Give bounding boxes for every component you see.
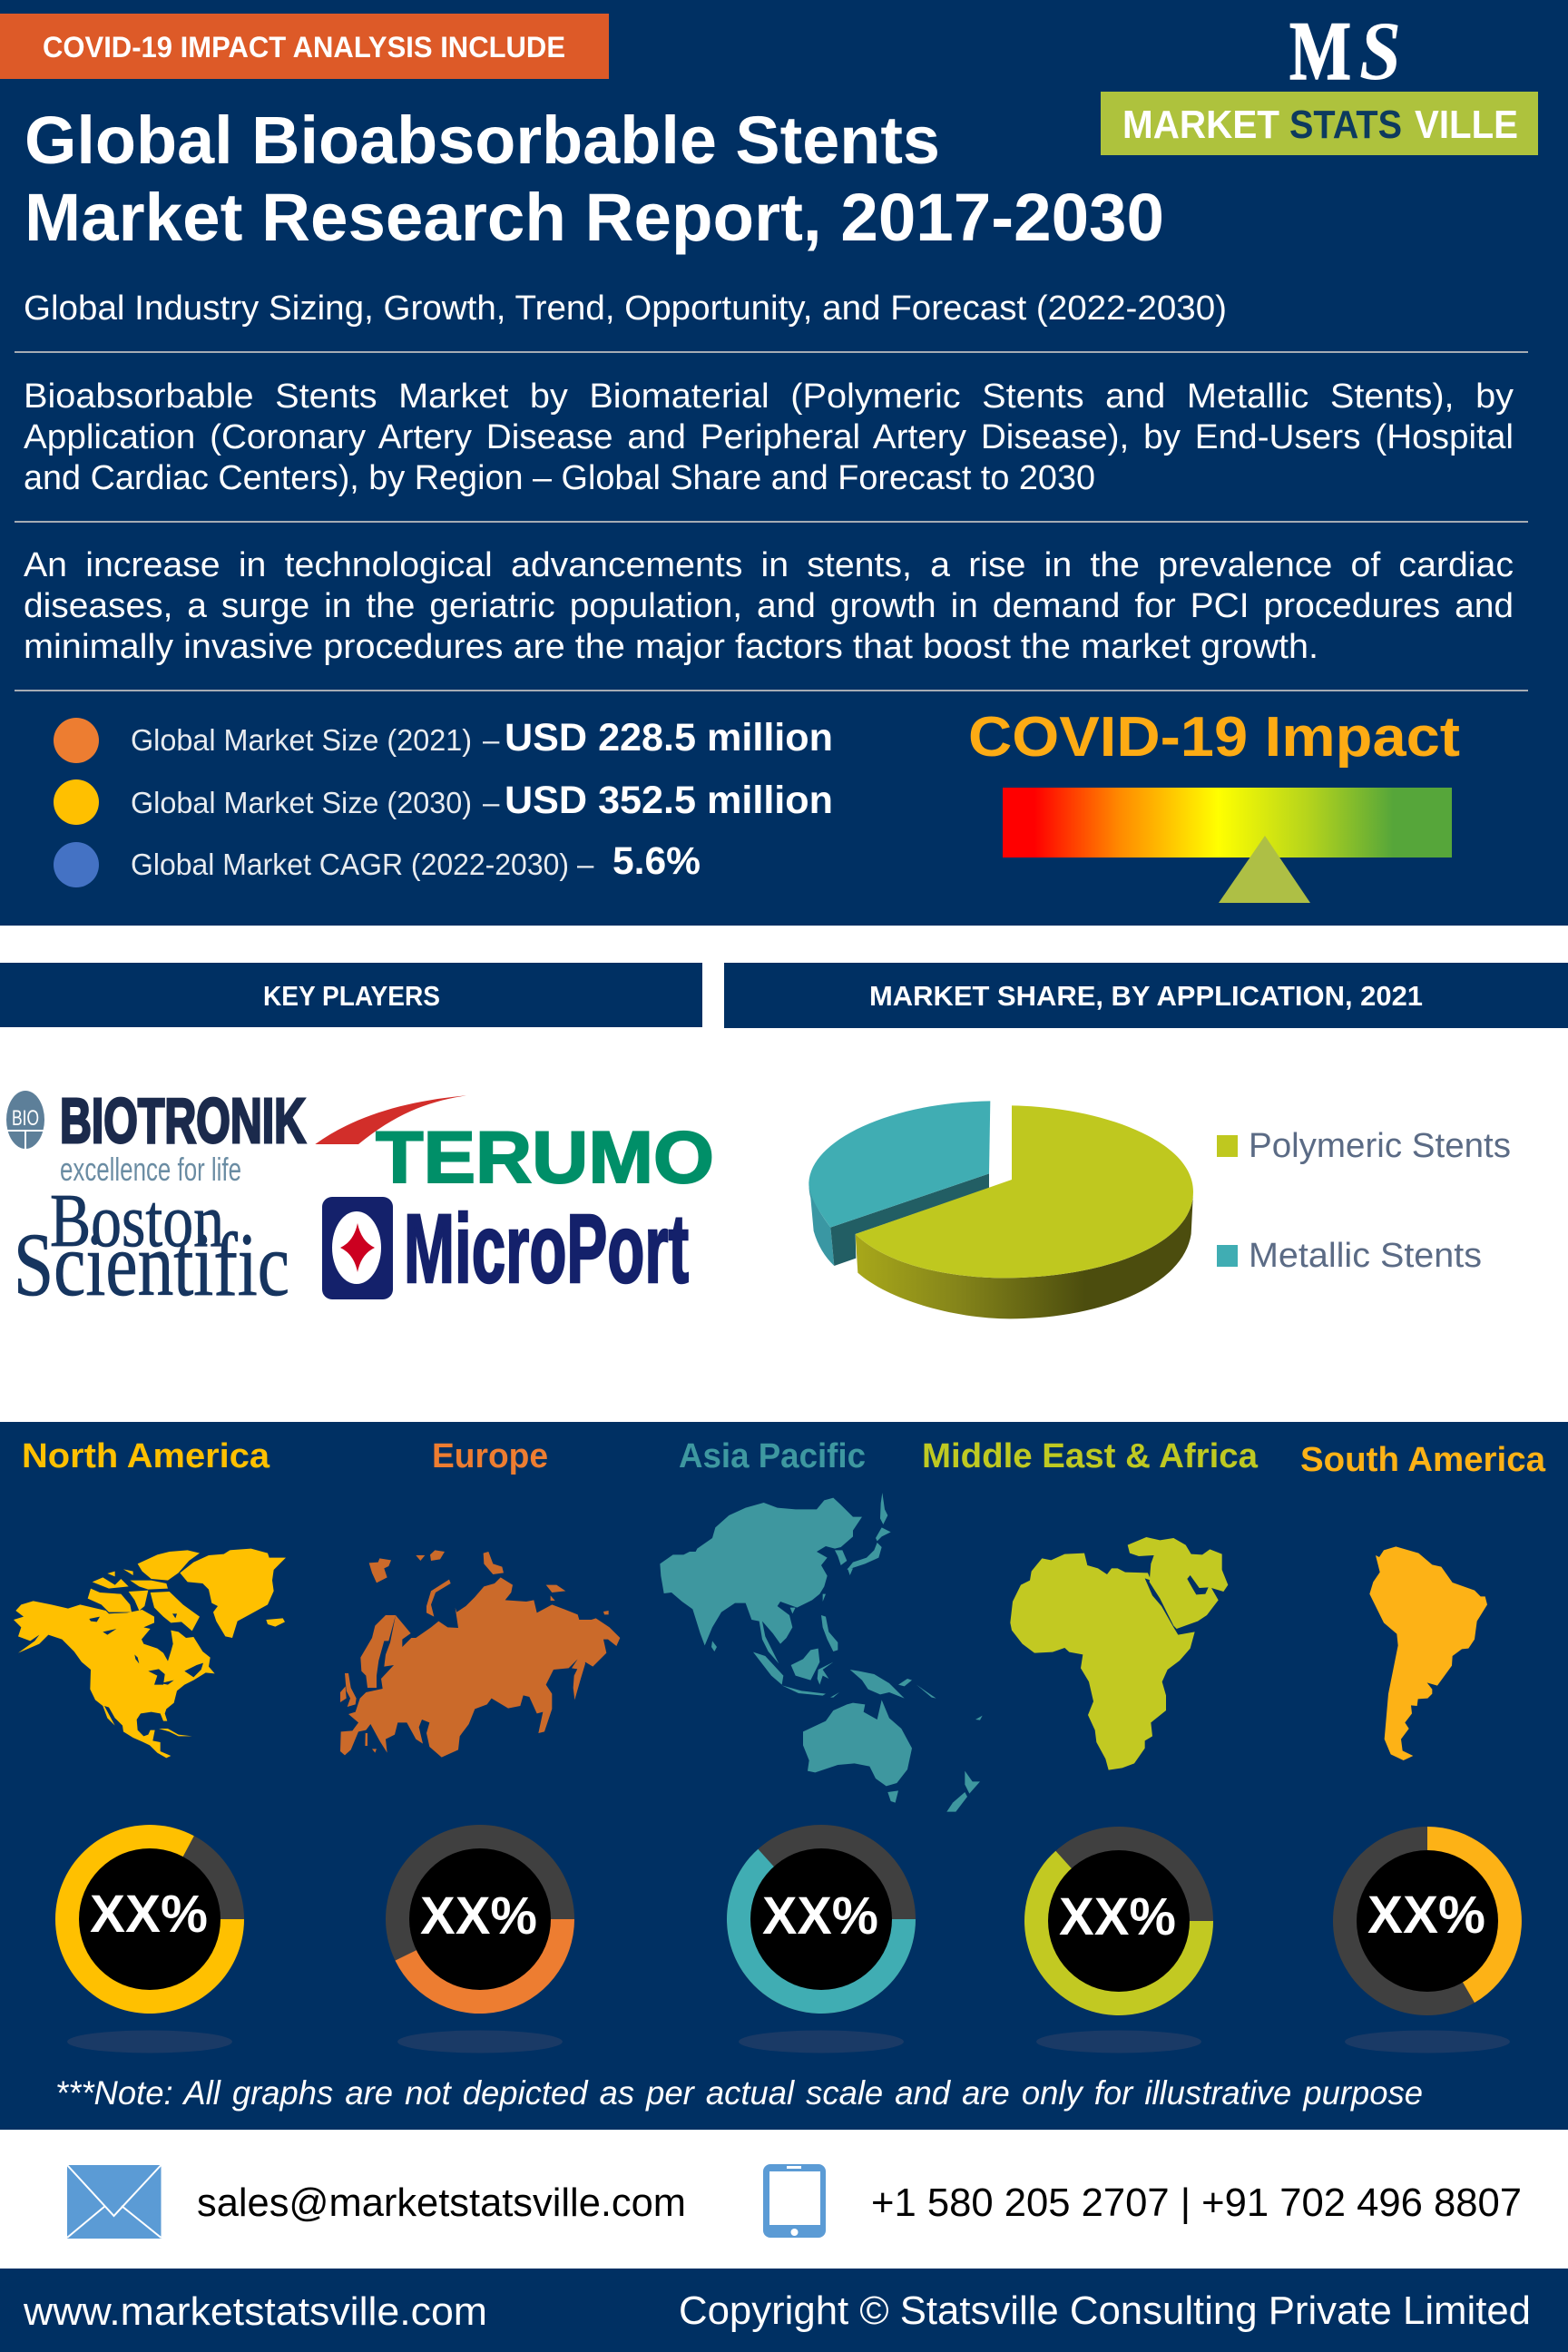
logo: Boston Scientific: Boston xyxy=(50,1179,224,1263)
footer: www.marketstatsville.com xyxy=(23,2289,487,2334)
donut: Middle East and Africa: XX% xyxy=(1059,1887,1176,1946)
pie chart: market share by application xyxy=(808,1101,1193,1318)
heading: market share by application xyxy=(724,963,1568,1028)
subtitle: Global Industry Sizing, Growth, Trend, Opportunity, and Forecast (2022-2030) xyxy=(24,289,1227,328)
donut: North America xyxy=(55,1825,244,2053)
logo: Biotronik: BIOTRONIK xyxy=(60,1085,306,1156)
heading: Europe: Europe xyxy=(432,1437,548,1475)
text block: market scope xyxy=(24,377,1514,497)
key statistics: USD 228.5 million xyxy=(505,716,833,760)
heading: Asia Pacific: Asia Pacific xyxy=(679,1437,866,1475)
title: Global Bioabsorbable Stents xyxy=(24,103,940,178)
text block: market scope: and Cardiac Centers), by Region – Global Share and Forecast to 2030 xyxy=(24,459,1095,497)
heading: Middle East and Africa: Middle East & Africa xyxy=(922,1437,1259,1475)
logo: MicroPort xyxy=(322,1193,689,1303)
donut: North America: XX% xyxy=(90,1885,208,1944)
heading: COVID-19 Impact: COVID-19 Impact xyxy=(968,706,1460,769)
donut: Europe: XX% xyxy=(420,1886,537,1945)
logo: Terumo: TERUMO xyxy=(376,1117,714,1199)
logo: Biotronik: excellence for life xyxy=(60,1151,241,1188)
heading: market share by application: MARKET SHARE, BY APPLICATION, 2021 xyxy=(869,980,1423,1012)
logo: Boston Scientific: Scientific xyxy=(14,1214,289,1315)
icon: envelope xyxy=(67,2165,162,2239)
logo: Biotronik: BIO xyxy=(12,1106,39,1131)
key statistics: 5.6% xyxy=(612,839,701,883)
text block: market drivers xyxy=(24,546,1514,666)
footer: Copyright © Statsville Consulting Private Limited xyxy=(679,2288,1531,2333)
logo: Biotronik xyxy=(5,1085,306,1188)
text block: market drivers: diseases, a surge in the geriatric population, and growth in demand for PCI procedures and xyxy=(24,587,1514,625)
key statistics: – xyxy=(577,848,594,881)
key statistics: – xyxy=(483,786,500,819)
panel: regional background xyxy=(0,1422,1568,2130)
logo: Boston Scientific xyxy=(14,1179,289,1315)
logo: MicroPort: MicroPort xyxy=(404,1193,689,1303)
title xyxy=(24,103,1164,255)
heading: key players: KEY PLAYERS xyxy=(263,980,440,1012)
heading: North America: North America xyxy=(22,1437,270,1475)
donut: Middle East and Africa xyxy=(1024,1827,1213,2053)
text block: market drivers: minimally invasive procedures are the major factors that boost the market growth. xyxy=(24,628,1318,666)
heading: key players xyxy=(0,963,702,1027)
map: Middle East and Africa xyxy=(1010,1537,1228,1770)
logo: Terumo xyxy=(315,1095,714,1199)
logo: Market Stats Ville: S xyxy=(1359,5,1401,97)
key statistics xyxy=(54,716,833,887)
logo: Market Stats Ville: MARKET xyxy=(1122,103,1279,147)
map: South America xyxy=(1369,1546,1487,1760)
text block: market scope: Bioabsorbable Stents Market by Biomaterial (Polymeric Stents and Metallic Stents), by xyxy=(24,377,1514,416)
heading: South America: South America xyxy=(1300,1441,1546,1479)
donut: Asia Pacific: XX% xyxy=(762,1886,878,1945)
banner: COVID-19 impact analysis xyxy=(0,14,609,79)
logo: Market Stats Ville: M xyxy=(1289,5,1351,97)
donut: Europe xyxy=(386,1825,574,2053)
panel: header background xyxy=(0,0,1568,926)
donut: South America: XX% xyxy=(1367,1886,1485,1945)
contact: phone numbers: +1 580 205 2707 | +91 702 496 8807 xyxy=(871,2180,1522,2225)
map: Asia Pacific xyxy=(660,1493,983,1812)
key statistics: Global Market Size (2021) xyxy=(131,723,472,757)
text block: market drivers: An increase in technological advancements in stents, a rise in the prevalence of cardiac xyxy=(24,546,1514,584)
footer xyxy=(0,2269,1568,2352)
map: Europe xyxy=(340,1550,620,1758)
icon: phone xyxy=(763,2164,826,2238)
note: ***Note: All graphs are not depicted as per actual scale and are only for illustrative purpose xyxy=(55,2074,1423,2112)
logo: Market Stats Ville xyxy=(1101,5,1538,155)
title: Market Research Report, 2017-2030 xyxy=(24,180,1164,255)
donut: Asia Pacific xyxy=(727,1825,916,2053)
map: North America xyxy=(14,1549,286,1758)
key statistics: – xyxy=(483,723,500,757)
banner: COVID-19 impact analysis: COVID-19 IMPACT ANALYSIS INCLUDE xyxy=(43,31,565,64)
contact: email: sales@marketstatsville.com xyxy=(197,2180,686,2225)
key statistics: Global Market CAGR (2022-2030) xyxy=(131,848,569,881)
legend: Metallic Stents: Metallic Stents xyxy=(1249,1237,1482,1275)
donut: South America xyxy=(1333,1827,1522,2053)
logo: Market Stats Ville: STATS xyxy=(1289,103,1402,147)
key statistics: USD 352.5 million xyxy=(505,779,833,822)
key statistics: Global Market Size (2030) xyxy=(131,786,472,819)
logo: Market Stats Ville: VILLE xyxy=(1415,103,1518,147)
legend: Polymeric Stents: Polymeric Stents xyxy=(1249,1127,1511,1165)
text block: market scope: Application (Coronary Artery Disease and Peripheral Artery Disease), by End-Users (Hospital xyxy=(24,418,1514,456)
gauge: COVID-19 impact scale xyxy=(1003,788,1452,903)
